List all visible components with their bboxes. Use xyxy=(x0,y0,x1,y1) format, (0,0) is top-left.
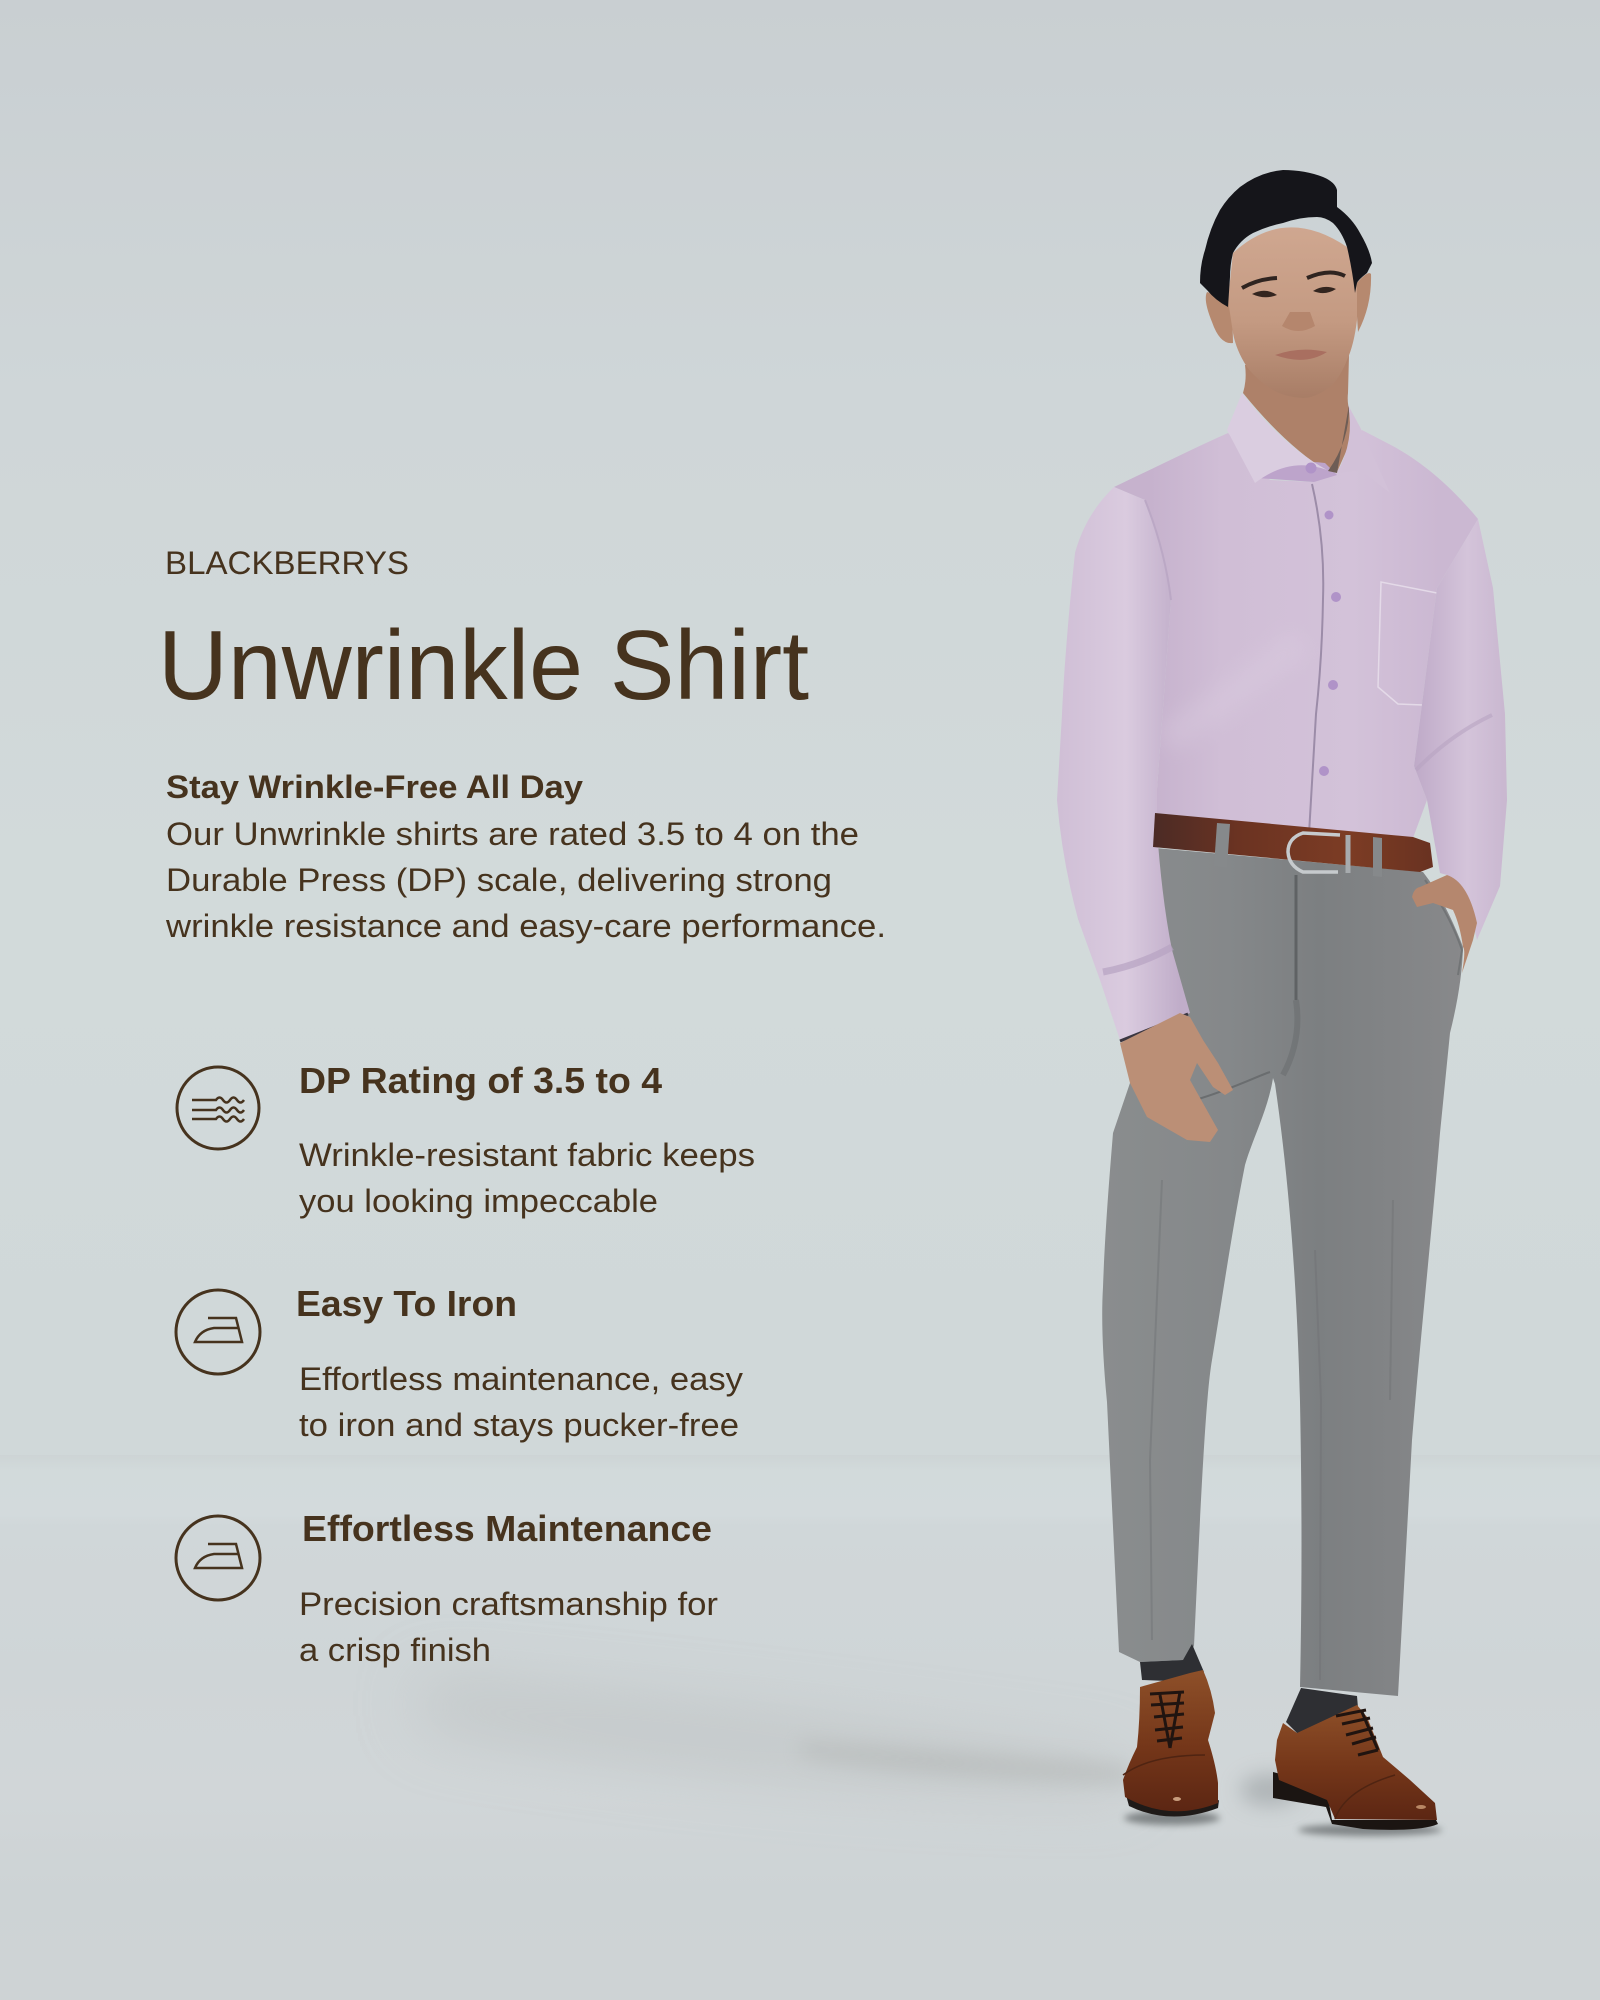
trousers xyxy=(1102,848,1463,1696)
right hand xyxy=(1412,875,1477,973)
intro text block xyxy=(165,769,886,944)
neck xyxy=(1243,355,1357,472)
feature: DP rating: Wrinkle-resistant fabric keeps xyxy=(299,1137,755,1173)
ears xyxy=(1206,273,1371,343)
feature: DP rating: DP Rating of 3.5 to 4 xyxy=(299,1060,662,1101)
hair xyxy=(1200,170,1372,307)
left hand xyxy=(1120,1013,1233,1142)
brows xyxy=(1242,272,1345,288)
intro text block: Durable Press (DP) scale, delivering strong xyxy=(166,862,832,898)
left shoe xyxy=(1123,1670,1219,1817)
head xyxy=(1200,170,1372,398)
feature: effortless maintenance: Effortless Maintenance xyxy=(302,1508,712,1549)
nose and mouth xyxy=(1282,312,1315,331)
feature: easy to iron: Easy To Iron xyxy=(296,1283,517,1324)
intro text block: Our Unwrinkle shirts are rated 3.5 to 4 on the xyxy=(166,816,859,852)
feature: effortless maintenance: a crisp finish xyxy=(299,1632,491,1668)
feature: easy to iron: Effortless maintenance, easy xyxy=(299,1361,743,1397)
shirt collar xyxy=(1227,393,1390,493)
feature: easy to iron xyxy=(176,1283,743,1443)
icon: iron xyxy=(176,1516,260,1600)
feature: easy to iron: to iron and stays pucker-free xyxy=(299,1407,739,1443)
right shoe xyxy=(1273,1705,1438,1830)
intro text block: Stay Wrinkle-Free All Day xyxy=(166,769,583,805)
icon: fabric waves xyxy=(177,1067,259,1149)
feature: effortless maintenance: Precision craftsmanship for xyxy=(299,1586,718,1622)
figure: man in lilac shirt and grey trousers xyxy=(1057,170,1507,1830)
feature: DP rating xyxy=(177,1060,755,1219)
title: Unwrinkle Shirt xyxy=(158,610,809,720)
left sleeve xyxy=(1057,487,1190,1041)
right sleeve xyxy=(1414,519,1507,940)
belt buckle xyxy=(1288,833,1340,872)
shirt body xyxy=(1114,430,1478,838)
icon: iron xyxy=(176,1290,260,1374)
face xyxy=(1228,227,1357,398)
belt xyxy=(1153,813,1433,877)
shirt buttons xyxy=(1319,510,1341,776)
feature: effortless maintenance xyxy=(176,1508,718,1668)
shirt pocket xyxy=(1378,582,1437,705)
intro text block: wrinkle resistance and easy-care performance. xyxy=(165,908,886,944)
feature: DP rating: you looking impeccable xyxy=(299,1183,658,1219)
eyes xyxy=(1252,287,1336,297)
brand name: BLACKBERRYS xyxy=(165,545,409,581)
socks xyxy=(1140,1644,1358,1734)
